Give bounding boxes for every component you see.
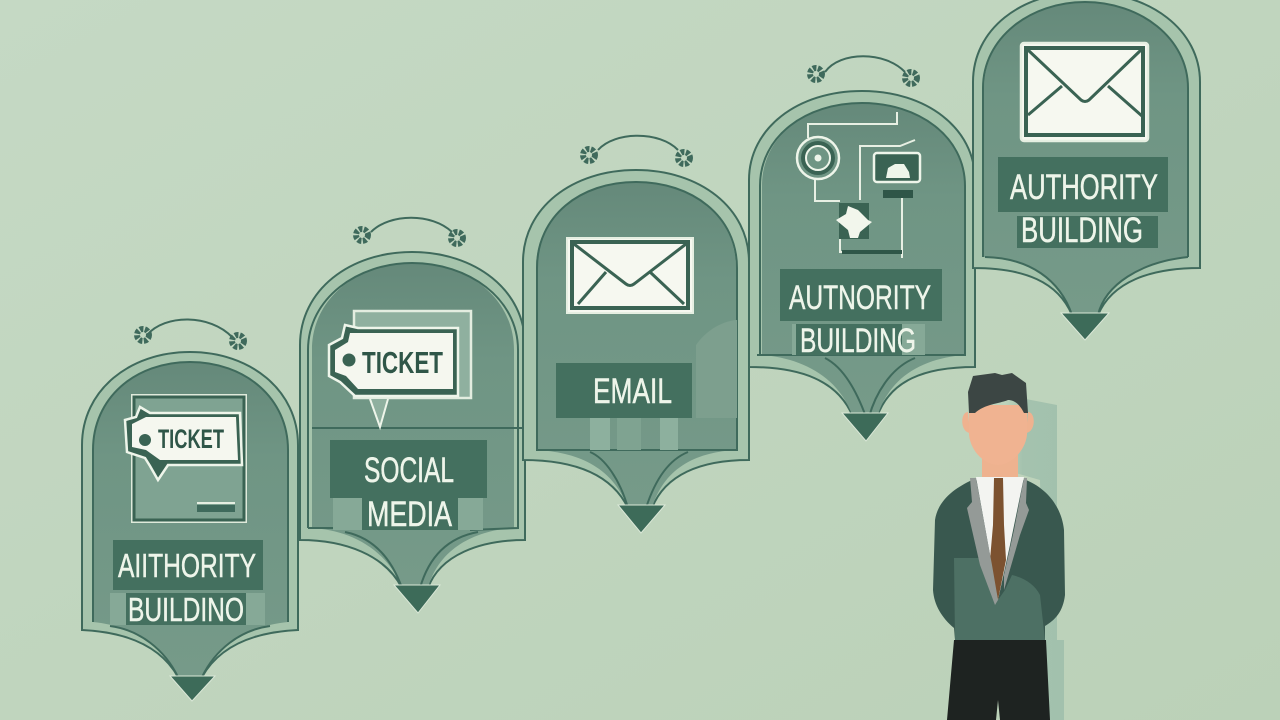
pin 2: social media: [300, 218, 525, 613]
pin 3 envelope icon: [567, 238, 693, 313]
pin 2 ticket text: TICKET: [362, 345, 443, 380]
person face: [969, 405, 1027, 465]
person jacket: [933, 480, 1065, 640]
pin 5 envelope icon: [1021, 43, 1148, 141]
pin 1 ticket icon: [125, 407, 242, 480]
pin 2 document frame: [354, 311, 471, 398]
pin 5 body: [973, 0, 1200, 340]
pin 3: email: [523, 136, 749, 533]
pin 3 label: [556, 363, 692, 418]
target icon: [797, 137, 839, 179]
pin 4 label line one: AUTNORITY: [789, 279, 931, 317]
small person icon: [836, 203, 872, 239]
pin 3 body: [523, 170, 749, 533]
pin 4 label line two: BUILDING: [800, 322, 916, 360]
person ears: [962, 412, 1034, 433]
pin 3 garland: [583, 136, 690, 164]
pin 5 label line two: BUILDING: [1021, 211, 1143, 250]
pin 2 label line one: SOCIAL: [364, 451, 454, 490]
person shirt: [976, 477, 1024, 600]
pin 4 body: [749, 91, 975, 441]
person trousers: [947, 640, 1050, 720]
pin 1 ticket text: TICKET: [158, 424, 224, 454]
pin 4 workflow diagram icon: [797, 112, 920, 258]
pin 4 label: [780, 269, 942, 360]
person shadow: [1005, 395, 1064, 720]
pin 5 label line one: AUTHORITY: [1010, 168, 1158, 207]
pin 2 body: [300, 252, 525, 613]
monitor icon: [874, 153, 920, 198]
pin 2 label line two: MEDIA: [367, 495, 452, 534]
pin 1 document frame: [132, 395, 246, 522]
pin 2 label: [330, 440, 487, 534]
person neck: [982, 455, 1018, 483]
pin 1 label line one: AIITHORITY: [118, 547, 256, 584]
pin 4 garland: [810, 56, 917, 84]
person tie: [990, 478, 1006, 600]
pin 4: authority building: [749, 56, 975, 441]
pin 1: authority building: [82, 319, 298, 701]
pin 5 label: [998, 157, 1168, 250]
pin 1 body: [82, 352, 298, 701]
pin 2 garland: [356, 218, 463, 244]
pin 1 garland: [137, 319, 244, 347]
person figure: [933, 373, 1065, 720]
pin 1 label: [110, 540, 265, 628]
person lapels: [967, 478, 1029, 605]
pin 3 label text: EMAIL: [593, 372, 672, 411]
person hair: [968, 373, 1028, 413]
pin 5: authority building: [973, 0, 1200, 340]
pin 2 ticket icon: [329, 325, 458, 427]
pin 1 label line two: BUILDINO: [128, 591, 244, 628]
